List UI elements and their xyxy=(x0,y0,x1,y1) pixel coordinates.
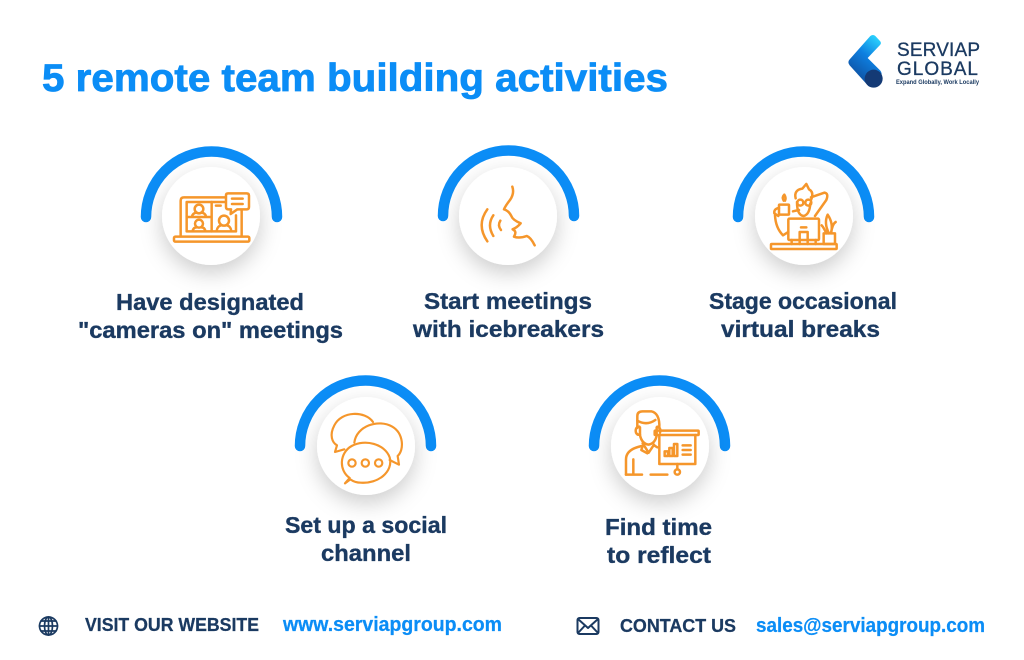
label: with icebreakers xyxy=(412,316,604,342)
title: 5 remote team building activities xyxy=(42,57,668,100)
logo tagline: Expand Globally, Work Locally xyxy=(896,79,980,86)
logo xyxy=(848,35,980,88)
label: to reflect xyxy=(607,542,711,568)
label: Stage occasional xyxy=(709,288,897,314)
footer: website xyxy=(40,614,502,636)
label xyxy=(285,512,447,566)
circle xyxy=(755,167,853,265)
logo mark xyxy=(848,35,883,88)
arc xyxy=(443,150,574,216)
icon: person on break at desk xyxy=(771,184,837,249)
label: Set up a social xyxy=(285,512,447,538)
icon: envelope xyxy=(578,618,598,634)
panel: reflect xyxy=(594,380,725,568)
arc xyxy=(300,380,431,446)
icon: speaking face xyxy=(482,187,535,245)
panel: icebreakers xyxy=(412,150,604,342)
arc xyxy=(738,152,869,217)
contact email: sales@serviapgroup.com xyxy=(756,615,985,637)
website url: www.serviapgroup.com xyxy=(282,614,502,636)
label: Have designated xyxy=(116,289,304,315)
arc xyxy=(594,380,725,446)
logo name: SERVIAP xyxy=(897,40,980,61)
label xyxy=(78,289,343,343)
contact label: CONTACT US xyxy=(620,616,736,636)
label: channel xyxy=(321,540,411,566)
label: "cameras on" meetings xyxy=(78,317,343,343)
label: Find time xyxy=(605,514,712,540)
panel: social channel xyxy=(285,380,447,566)
circle xyxy=(459,167,557,265)
panel: cameras on meetings xyxy=(78,152,343,343)
icon: presenter with chart xyxy=(626,411,699,475)
label xyxy=(412,288,604,342)
arc xyxy=(146,152,277,217)
website label: VISIT OUR WEBSITE xyxy=(85,615,259,635)
footer: contact xyxy=(578,615,985,637)
icon: chat bubbles xyxy=(332,414,402,483)
label: Start meetings xyxy=(424,288,592,314)
logo name second line: GLOBAL xyxy=(897,59,978,80)
label xyxy=(605,514,712,568)
panel: virtual breaks xyxy=(709,152,897,342)
circle xyxy=(611,397,709,495)
circle xyxy=(317,397,415,495)
label: virtual breaks xyxy=(721,316,880,342)
icon: video call laptop xyxy=(174,193,249,242)
icon: globe xyxy=(40,617,58,635)
label xyxy=(709,288,897,342)
circle xyxy=(162,167,260,265)
